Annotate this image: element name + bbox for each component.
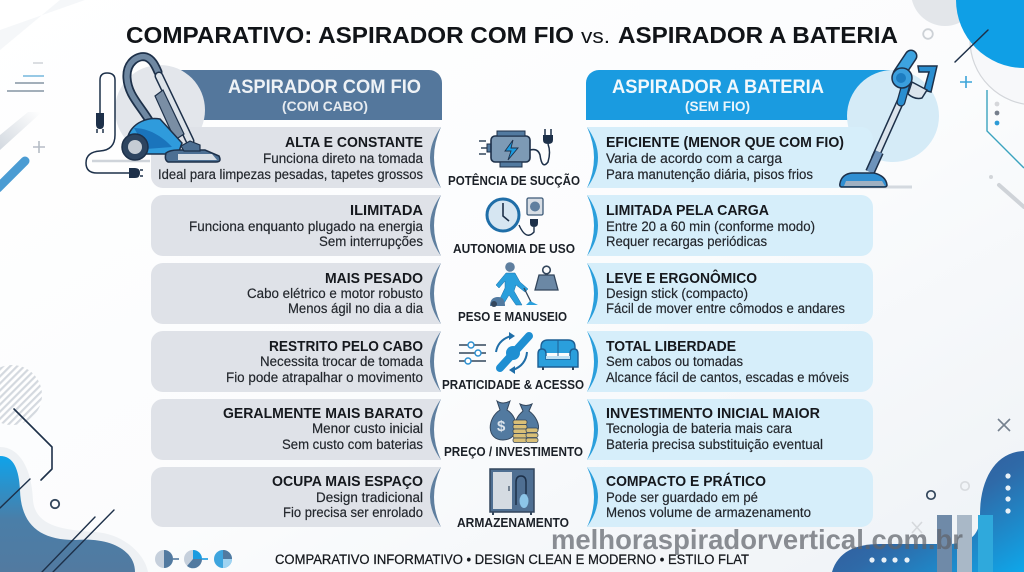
row: peso, com fio: Cabo elétrico e motor robusto bbox=[247, 286, 423, 301]
row: peso, com fio bbox=[151, 263, 441, 324]
header: aspirador com fio: ASPIRADOR COM FIO bbox=[228, 77, 421, 98]
row: preço, com fio: Sem custo com baterias bbox=[282, 437, 423, 452]
row: praticidade, com fio: Fio pode atrapalhar o movimento bbox=[226, 370, 423, 385]
row: autonomia, bateria: LIMITADA PELA CARGA bbox=[606, 202, 769, 219]
row: preço, bateria: Tecnologia de bateria mais cara bbox=[606, 421, 792, 436]
decoration: bottom pie icons bbox=[155, 550, 232, 568]
row: praticidade, bateria: Sem cabos ou tomadas bbox=[606, 354, 743, 369]
row: peso, bateria: Design stick (compacto) bbox=[606, 286, 748, 301]
title bbox=[126, 22, 898, 48]
row: autonomia, bateria bbox=[587, 195, 873, 256]
row: potência, bateria: Para manutenção diária, pisos frios bbox=[606, 167, 813, 182]
row: praticidade, com fio: RESTRITO PELO CABO bbox=[269, 338, 423, 355]
row: potência, bateria bbox=[587, 127, 873, 188]
row: armazenamento, bateria: Menos volume de armazenamento bbox=[606, 505, 811, 520]
row: potência, bateria: EFICIENTE (MENOR QUE COM FIO) bbox=[606, 134, 844, 151]
row: peso, bateria bbox=[587, 263, 873, 324]
row: potência, com fio bbox=[151, 127, 441, 188]
header: aspirador com fio bbox=[115, 65, 442, 155]
row: armazenamento, bateria bbox=[587, 467, 873, 527]
row: armazenamento, bateria: COMPACTO E PRÁTICO bbox=[606, 473, 766, 490]
row: autonomia, com fio: Funciona enquanto plugado na energia bbox=[189, 219, 423, 234]
label: potência de sucção: POTÊNCIA DE SUCÇÃO bbox=[448, 173, 580, 188]
header: aspirador com fio: (COM CABO) bbox=[282, 99, 368, 114]
label: armazenamento: ARMAZENAMENTO bbox=[457, 516, 569, 530]
title: vs. bbox=[581, 26, 610, 48]
row: autonomia, bateria: Requer recargas periódicas bbox=[606, 234, 767, 249]
row: armazenamento, com fio: Fio precisa ser enrolado bbox=[283, 505, 423, 520]
row: autonomia, bateria: Entre 20 a 60 min (conforme modo) bbox=[606, 219, 815, 234]
row: praticidade, com fio: Necessita trocar de tomada bbox=[260, 354, 423, 369]
label: peso e manuseio: PESO E MANUSEIO bbox=[458, 310, 567, 324]
watermark: melhoraspiradorvertical.com.br bbox=[551, 524, 963, 555]
row: armazenamento, com fio: OCUPA MAIS ESPAÇO bbox=[272, 473, 423, 490]
row: preço, bateria bbox=[587, 399, 873, 460]
row: peso, com fio: MAIS PESADO bbox=[325, 270, 423, 287]
row: praticidade, bateria: TOTAL LIBERDADE bbox=[606, 338, 736, 355]
row: praticidade, bateria: Alcance fácil de cantos, escadas e móveis bbox=[606, 370, 849, 385]
row: praticidade, com fio bbox=[151, 331, 441, 392]
row: armazenamento, bateria: Pode ser guardado em pé bbox=[606, 490, 758, 505]
row: potência, bateria: Varia de acordo com a carga bbox=[606, 151, 783, 166]
row: praticidade, bateria bbox=[587, 331, 873, 392]
right column rows bbox=[587, 127, 873, 527]
label: autonomia de uso: AUTONOMIA DE USO bbox=[453, 242, 575, 256]
row: armazenamento, com fio bbox=[151, 467, 441, 527]
icon: money bags and coins bbox=[490, 401, 539, 442]
icon: sliders, tool and sofa bbox=[459, 332, 578, 374]
title: ASPIRADOR A BATERIA bbox=[618, 22, 898, 48]
label: preço / investimento: PREÇO / INVESTIMENTO bbox=[444, 445, 583, 459]
icon: money bags and coins: $ bbox=[497, 418, 506, 435]
row: autonomia, com fio bbox=[151, 195, 441, 256]
header: aspirador a bateria bbox=[586, 70, 939, 162]
icon: clock and socket bbox=[487, 198, 543, 235]
center column bbox=[442, 129, 584, 530]
row: autonomia, com fio: ILIMITADA bbox=[350, 202, 423, 219]
icon: canister vacuum with cord bbox=[86, 57, 220, 178]
left column rows bbox=[151, 127, 441, 527]
footer text: COMPARATIVO INFORMATIVO • DESIGN CLEAN E MODERNO • ESTILO FLAT bbox=[275, 552, 749, 567]
title: COMPARATIVO: ASPIRADOR COM FIO bbox=[126, 22, 574, 48]
decoration: bottom left blob bbox=[0, 409, 148, 572]
decoration: top right bbox=[911, 0, 1024, 207]
header: aspirador a bateria: (SEM FIO) bbox=[685, 99, 750, 114]
row: peso, com fio: Menos ágil no dia a dia bbox=[288, 301, 423, 316]
row: peso, bateria: Fácil de mover entre cômodos e andares bbox=[606, 301, 845, 316]
row: preço, com fio bbox=[151, 399, 441, 460]
row: potência, com fio: Funciona direto na tomada bbox=[263, 151, 423, 166]
row: peso, bateria: LEVE E ERGONÔMICO bbox=[606, 269, 757, 287]
row: autonomia, com fio: Sem interrupções bbox=[319, 234, 423, 249]
row: preço, com fio: GERALMENTE MAIS BARATO bbox=[223, 405, 423, 422]
label: praticidade e acesso: PRATICIDADE & ACESSO bbox=[442, 378, 584, 392]
row: armazenamento, com fio: Design tradicional bbox=[316, 490, 423, 505]
icon: stick vacuum bbox=[840, 56, 937, 187]
row: preço, com fio: Menor custo inicial bbox=[312, 421, 423, 436]
decoration: top left bbox=[0, 0, 85, 188]
icon: person vacuuming and weight bbox=[490, 262, 558, 307]
row: preço, bateria: Bateria precisa substituição eventual bbox=[606, 437, 823, 452]
row: potência, com fio: Ideal para limpezas pesadas, tapetes grossos bbox=[158, 167, 423, 182]
icon: motor bbox=[479, 129, 553, 167]
header: aspirador a bateria: ASPIRADOR A BATERIA bbox=[612, 77, 824, 98]
icon: storage cabinet bbox=[490, 469, 534, 515]
decoration: hatched circle bbox=[0, 365, 42, 425]
row: preço, bateria: INVESTIMENTO INICIAL MAIOR bbox=[606, 405, 820, 422]
decoration: bottom right shapes bbox=[832, 419, 1024, 572]
row: potência, com fio: ALTA E CONSTANTE bbox=[285, 134, 423, 151]
